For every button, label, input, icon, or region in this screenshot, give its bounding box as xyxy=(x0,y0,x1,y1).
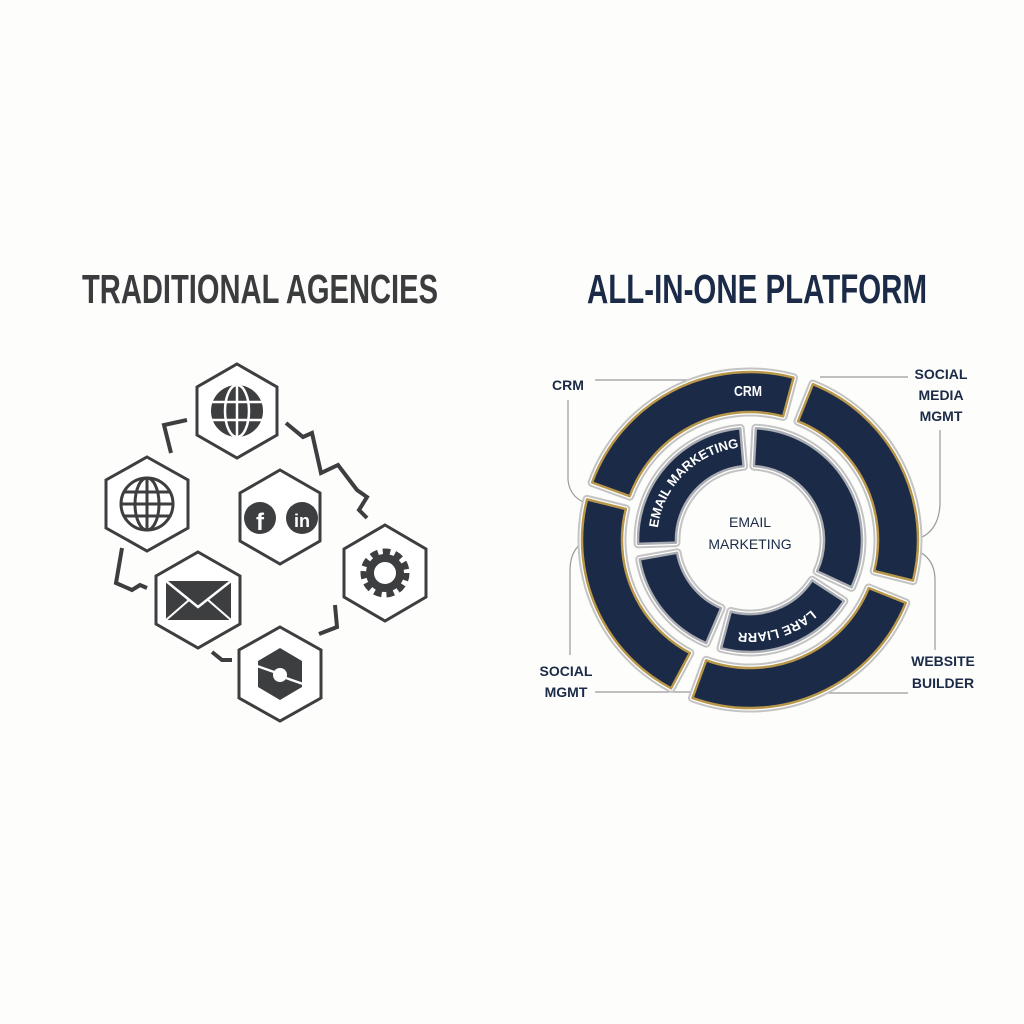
ring text: inner email marketing: EMAIL MARKETING xyxy=(649,439,738,528)
hex: globe top xyxy=(197,364,277,458)
side labels: MEDIA xyxy=(918,387,964,403)
center label: EMAIL xyxy=(729,514,771,530)
side labels: WEBSITE xyxy=(911,653,975,669)
ring text: CRM: CRM xyxy=(734,383,762,400)
panel: all-in-one platform ring diagram: MARKETING xyxy=(708,536,792,552)
hex: envelope xyxy=(156,552,240,648)
outer ring segments xyxy=(582,372,918,708)
panel: all-in-one platform ring diagram xyxy=(540,366,975,712)
hex: gear xyxy=(344,525,426,621)
side labels: MGMT xyxy=(920,408,963,424)
hex: social facebook linkedin: in xyxy=(294,511,310,531)
connectors xyxy=(116,420,367,660)
hex: social facebook linkedin: f xyxy=(256,509,265,536)
side labels: SOCIAL xyxy=(540,663,593,679)
hex: globe left xyxy=(106,457,188,551)
panel: traditional agencies hex network xyxy=(106,364,426,721)
side labels xyxy=(540,366,975,700)
ring text: inner bottom-right: LARE LIARR xyxy=(738,610,816,642)
side labels: SOCIAL xyxy=(915,366,968,382)
side labels: CRM xyxy=(552,377,584,393)
title: traditional agencies: TRADITIONAL AGENCIES xyxy=(82,266,438,312)
hex: bottom app icon xyxy=(239,627,321,721)
side labels: BUILDER xyxy=(912,675,974,691)
hex: social facebook linkedin xyxy=(240,470,320,564)
side labels: MGMT xyxy=(545,684,588,700)
leader lines xyxy=(568,377,940,693)
